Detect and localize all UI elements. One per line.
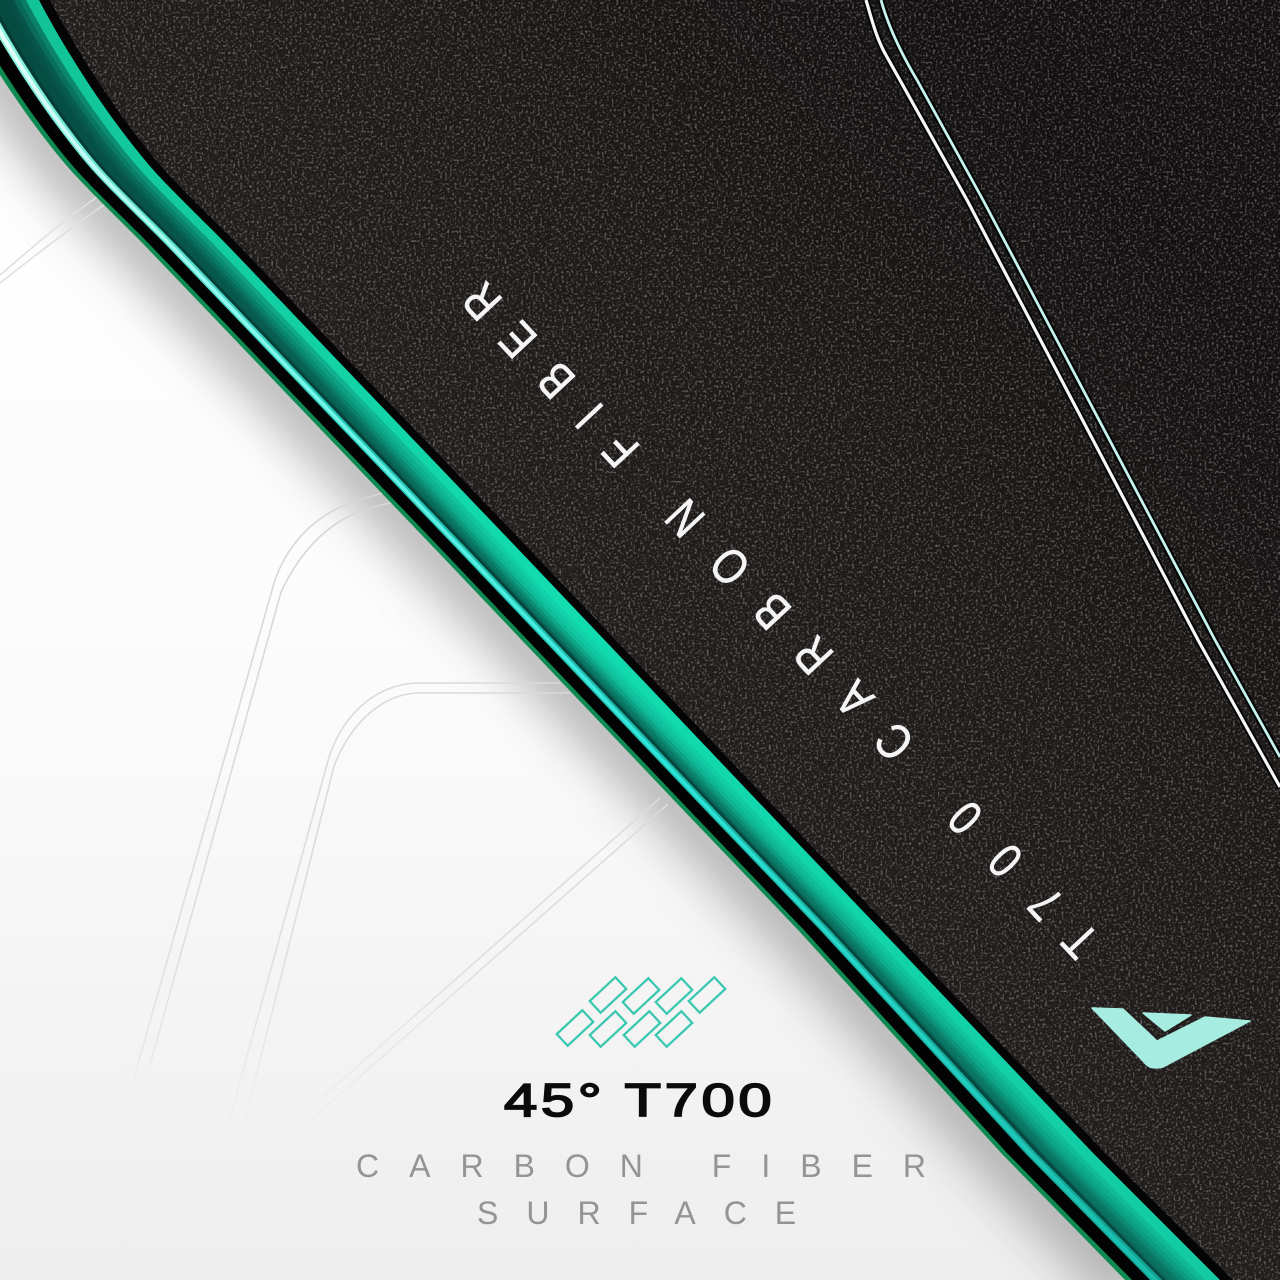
subheading: CARBON FIBER SURFACE: SURFACE [477, 1195, 824, 1231]
subheading: CARBON FIBER SURFACE [356, 1148, 956, 1231]
icon: brick weave of 45 degree carbon fibers [557, 977, 725, 1047]
heading: 45° T700: 45° T700 [504, 1075, 775, 1126]
decorative ghost outline lines [0, 195, 668, 1150]
icon: paddle brand logo [1092, 1008, 1250, 1068]
subheading: CARBON FIBER SURFACE: CARBON FIBER [356, 1148, 956, 1184]
paddle graphic: double contour lines [866, 0, 1280, 787]
rotated label: T700 CARBON FIBER: T700 CARBON FIBER [451, 272, 1109, 969]
